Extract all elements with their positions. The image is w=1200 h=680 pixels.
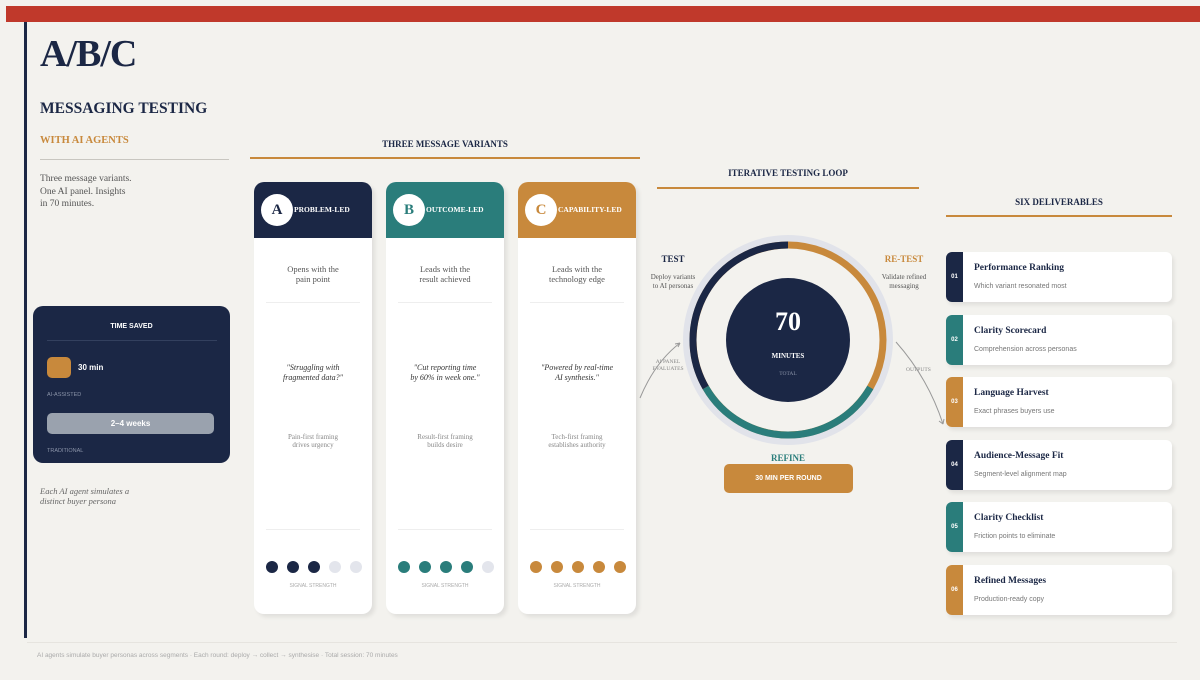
card A: "Struggling with xyxy=(287,363,339,372)
chart: testing loop ring: TOTAL xyxy=(779,371,797,377)
label: re-test xyxy=(882,254,926,290)
label: test: TEST xyxy=(661,254,684,264)
deliverable 03: Exact phrases buyers use xyxy=(974,408,1055,415)
chart: testing loop ring: MINUTES xyxy=(772,352,804,360)
panel: time saved xyxy=(33,306,230,463)
deliverable 02: Comprehension across personas xyxy=(974,346,1077,353)
footer: AI agents simulate buyer personas across segments · Each round: deploy → collect → synthesise · Total session: 70 minutes xyxy=(37,652,398,659)
card C: "Powered by real-time xyxy=(541,363,613,372)
card A: drives urgency xyxy=(292,441,334,449)
note: distinct buyer persona xyxy=(40,496,116,506)
card B: Leads with the xyxy=(420,264,470,274)
card C: AI synthesis." xyxy=(555,373,599,382)
traditional bar: 2–4 weeks xyxy=(111,419,150,428)
card C: Leads with the xyxy=(552,264,602,274)
card B: SIGNAL STRENGTH xyxy=(421,583,469,589)
text: OUTPUTS xyxy=(906,367,931,373)
card A: PROBLEM-LED xyxy=(294,205,350,214)
label: re-test: RE-TEST xyxy=(885,254,923,264)
card B: builds desire xyxy=(427,441,463,449)
card B: Result-first framing xyxy=(417,433,473,441)
tagline: WITH AI AGENTS xyxy=(40,135,129,146)
deliverable 02: Clarity Scorecard xyxy=(974,326,1046,336)
arrow: outputs xyxy=(896,342,944,424)
text: AI PANEL xyxy=(656,359,680,365)
card B: result achieved xyxy=(419,274,471,284)
deliverable 04: Segment-level alignment map xyxy=(974,471,1067,478)
card A: A xyxy=(272,202,282,218)
card C: technology edge xyxy=(549,274,605,284)
panel: time saved: TRADITIONAL xyxy=(47,448,83,454)
deliverable 05: Clarity Checklist xyxy=(974,513,1043,523)
deliverable 01: Which variant resonated most xyxy=(974,283,1067,290)
label: refine: REFINE xyxy=(771,453,805,463)
card A: SIGNAL STRENGTH xyxy=(289,583,337,589)
label: re-test: Validate refined xyxy=(882,273,926,281)
card C: CAPABILITY-LED xyxy=(558,205,622,214)
chart: testing loop ring: 70 xyxy=(775,307,801,336)
card A: Opens with the xyxy=(287,264,339,274)
arrow: AI panel evaluates xyxy=(640,342,680,398)
deliverable 01: Performance Ranking xyxy=(974,263,1064,273)
button: 30 min per round xyxy=(724,464,853,493)
title: A/B/C xyxy=(40,33,136,75)
label: test: Deploy variants xyxy=(651,273,695,281)
deliverable 01: 01 xyxy=(951,274,958,280)
deliverable 06: 06 xyxy=(951,587,958,593)
card C: SIGNAL STRENGTH xyxy=(553,583,601,589)
deliverable 05: 05 xyxy=(951,524,958,530)
subtitle: MESSAGING TESTING xyxy=(40,100,207,117)
label: test: to AI personas xyxy=(653,282,693,290)
card B: "Cut reporting time xyxy=(414,363,476,372)
section heading: iterative testing loop: ITERATIVE TESTING LOOP xyxy=(728,168,848,178)
card C: Tech-first framing xyxy=(551,433,603,441)
deliverable 03: Language Harvest xyxy=(974,388,1049,398)
card A: fragmented data?" xyxy=(283,373,343,382)
card B: OUTCOME-LED xyxy=(426,205,484,214)
deliverable 05: Friction points to eliminate xyxy=(974,533,1055,540)
deliverable 04: Audience-Message Fit xyxy=(974,451,1063,461)
intro text: in 70 minutes. xyxy=(40,199,94,209)
section heading: six deliverables: SIX DELIVERABLES xyxy=(1015,197,1103,207)
intro text: Three message variants. xyxy=(40,174,132,184)
label: re-test: messaging xyxy=(889,282,919,290)
card B: by 60% in week one." xyxy=(410,373,480,382)
deliverable 04: 04 xyxy=(951,462,958,468)
deliverable 06 xyxy=(946,565,1172,615)
panel: time saved: 30 min xyxy=(78,363,103,372)
card B xyxy=(386,182,504,614)
intro text xyxy=(40,174,132,209)
card A: Pain-first framing xyxy=(288,433,338,441)
deliverable 03 xyxy=(946,377,1172,427)
traditional bar xyxy=(47,413,214,434)
card C: establishes authority xyxy=(548,441,606,449)
card C xyxy=(518,182,636,614)
section heading: three message variants: THREE MESSAGE VARIANTS xyxy=(382,139,508,149)
heading: time saved: TIME SAVED xyxy=(110,323,153,330)
chart: testing loop ring xyxy=(683,235,893,445)
left vertical accent line xyxy=(24,22,27,638)
text: EVALUATES xyxy=(652,366,684,372)
panel: time saved: AI-ASSISTED xyxy=(47,392,81,398)
deliverable 01 xyxy=(946,252,1172,302)
deliverable 03: 03 xyxy=(951,399,958,405)
deliverable 04 xyxy=(946,440,1172,490)
intro text: One AI panel. Insights xyxy=(40,186,126,196)
deliverable 06: Production-ready copy xyxy=(974,596,1044,603)
card A: pain point xyxy=(296,274,330,284)
deliverable 05 xyxy=(946,502,1172,552)
deliverable 02: 02 xyxy=(951,337,958,343)
deliverable 02 xyxy=(946,315,1172,365)
card B: B xyxy=(404,202,414,218)
card C: C xyxy=(536,202,546,218)
top red bar xyxy=(6,6,1200,22)
card A xyxy=(254,182,372,614)
label: test xyxy=(650,254,695,290)
note xyxy=(40,486,129,506)
deliverable 06: Refined Messages xyxy=(974,576,1046,586)
AI-assisted bar xyxy=(47,357,71,378)
button: 30 min per round: 30 MIN PER ROUND xyxy=(755,475,822,482)
note: Each AI agent simulates a xyxy=(40,486,129,496)
